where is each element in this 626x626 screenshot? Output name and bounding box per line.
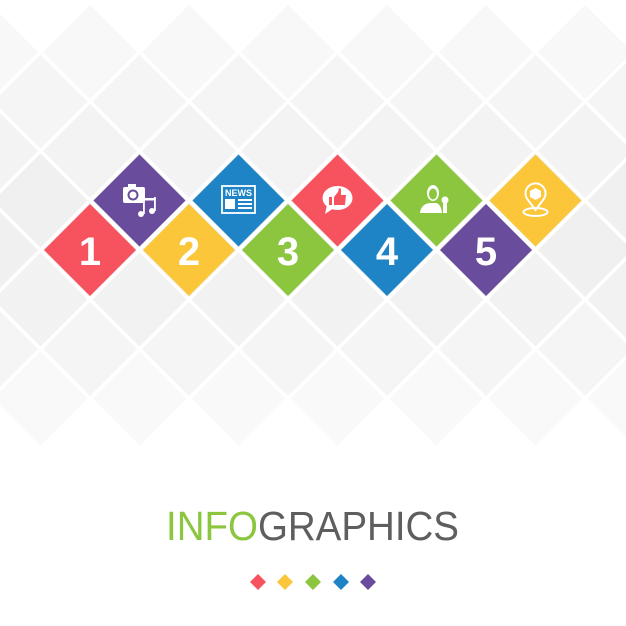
step 5 number diamond: [440, 204, 532, 296]
step 3 number diamond: [242, 204, 334, 296]
title: INFOGRAPHICS: [166, 503, 459, 549]
color dots row: [250, 574, 376, 590]
icon diamond: like speech bubble: [292, 154, 384, 246]
step 3 number diamond: 3: [277, 230, 299, 274]
step 4 number diamond: 4: [376, 230, 399, 274]
icon diamond: location box: [490, 154, 582, 246]
icon diamond: news: NEWS: [225, 188, 252, 198]
step 4 number diamond: [341, 204, 433, 296]
step 5 number diamond: 5: [475, 230, 497, 274]
icon diamond: camera and music: [94, 154, 186, 246]
icon diamond: news: [192, 154, 284, 246]
step 1 number diamond: [44, 204, 136, 296]
step 1 number diamond: 1: [79, 230, 101, 274]
step 2 number diamond: 2: [178, 230, 200, 274]
step 2 number diamond: [143, 204, 235, 296]
icon diamond: reporter: [390, 154, 482, 246]
